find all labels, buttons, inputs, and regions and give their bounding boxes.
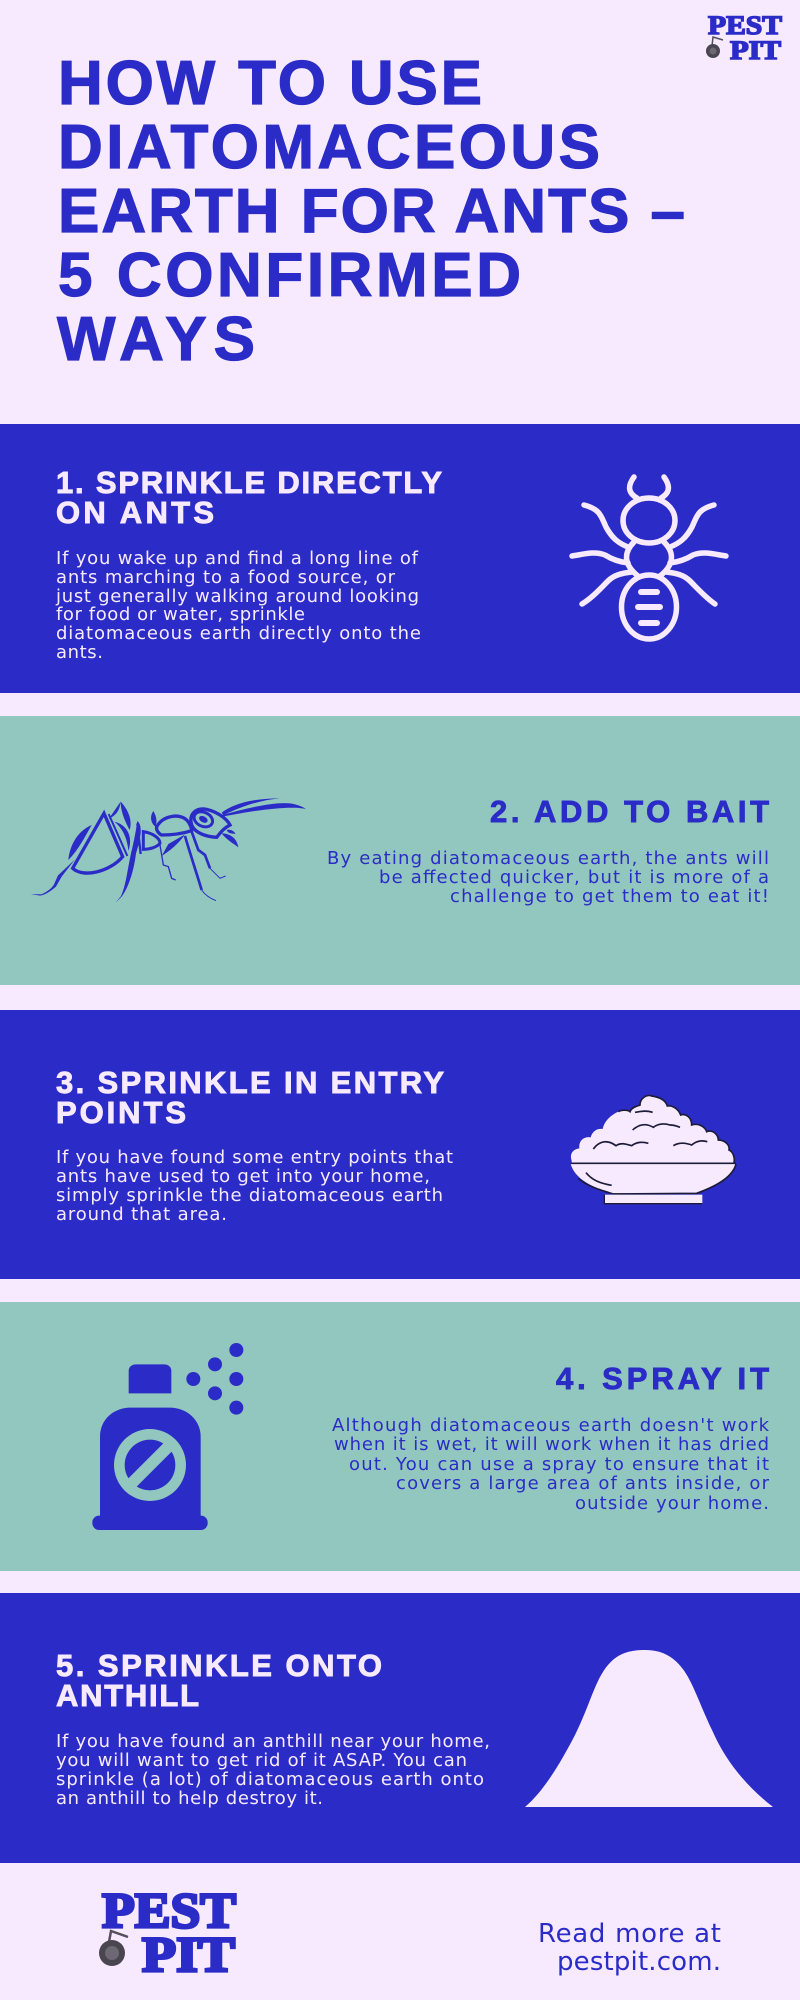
text: step 3 description: simply sprinkle the diatomaceous earth bbox=[56, 1185, 443, 1206]
text: step 1 description: for food or water, sprinkle bbox=[56, 604, 305, 625]
title: WAYS bbox=[57, 305, 255, 374]
text: step 1 description: ants marching to a food source, or bbox=[56, 567, 396, 588]
heading: step 3 bbox=[56, 1065, 444, 1130]
text: step 4 description bbox=[332, 1415, 770, 1514]
panel: 2 add to bait bbox=[0, 716, 800, 985]
text: step 3 description: around that area. bbox=[56, 1204, 227, 1225]
icon: ant outline bbox=[572, 477, 726, 639]
text: step 2 description: challenge to get them to eat it! bbox=[450, 886, 769, 907]
text: step 4 description: outside your home. bbox=[575, 1493, 769, 1514]
text: step 1 description: ants. bbox=[56, 642, 103, 663]
panel: 5 sprinkle onto anthill bbox=[0, 1593, 800, 1863]
heading: step 5: ANTHILL bbox=[56, 1678, 199, 1713]
heading: step 3: 3. SPRINKLE IN ENTRY bbox=[56, 1065, 444, 1100]
logo: top right: PEST bbox=[708, 11, 782, 40]
text: step 3 description: If you have found some entry points that bbox=[56, 1147, 453, 1168]
heading: step 5 bbox=[56, 1648, 382, 1713]
heading: step 3: POINTS bbox=[56, 1095, 186, 1130]
heading: step 2: 2. ADD TO BAIT bbox=[490, 794, 769, 829]
title: 5 CONFIRMED bbox=[58, 241, 521, 310]
logo: top right: PIT bbox=[730, 36, 781, 65]
panel: 1 sprinkle directly on ants bbox=[0, 424, 800, 693]
title: EARTH FOR ANTS – bbox=[58, 177, 685, 246]
text: read more: Read more at bbox=[538, 1919, 721, 1949]
heading: step 1 bbox=[56, 465, 442, 530]
text: step 2 description: be affected quicker, but it is more of a bbox=[379, 867, 769, 888]
text: step 2 description bbox=[327, 848, 769, 907]
heading: step 1: ON ANTS bbox=[56, 495, 214, 530]
title: DIATOMACEOUS bbox=[58, 113, 600, 182]
text: step 5 description: If you have found an anthill near your home, bbox=[56, 1731, 490, 1752]
text: step 4 description: when it is wet, it will work when it has dried bbox=[334, 1434, 769, 1455]
logo: footer: PIT bbox=[142, 1926, 235, 1982]
logo: top right bbox=[706, 11, 782, 65]
text: step 3 description: ants have used to get into your home, bbox=[56, 1166, 430, 1187]
text: read more: pestpit.com. bbox=[557, 1947, 721, 1977]
text: read more bbox=[538, 1919, 721, 1977]
heading: step 5: 5. SPRINKLE ONTO bbox=[56, 1648, 382, 1683]
logo: footer: PEST bbox=[102, 1882, 236, 1938]
title bbox=[57, 49, 685, 374]
text: step 5 description: you will want to get rid of it ASAP. You can bbox=[56, 1750, 467, 1771]
panel: 3 sprinkle in entry points bbox=[0, 1010, 800, 1279]
text: step 5 description bbox=[56, 1731, 490, 1809]
text: step 4 description: Although diatomaceous earth doesn't work bbox=[332, 1415, 770, 1436]
heading: step 4: 4. SPRAY IT bbox=[556, 1361, 769, 1396]
text: step 5 description: sprinkle (a lot) of diatomaceous earth onto bbox=[56, 1769, 484, 1790]
text: step 1 description: If you wake up and find a long line of bbox=[56, 548, 419, 569]
text: step 1 description bbox=[55, 548, 421, 663]
text: step 4 description: out. You can use a spray to ensure that it bbox=[349, 1454, 769, 1475]
heading: step 1: 1. SPRINKLE DIRECTLY bbox=[56, 465, 442, 500]
text: step 3 description bbox=[56, 1147, 453, 1225]
text: step 1 description: diatomaceous earth directly onto the bbox=[56, 623, 421, 644]
logo: footer bbox=[99, 1882, 236, 1982]
panel: 4 spray it bbox=[0, 1302, 800, 1571]
title: HOW TO USE bbox=[58, 49, 482, 118]
icon: spray bottle bbox=[92, 1343, 243, 1530]
icon: anthill mound bbox=[525, 1650, 773, 1807]
text: step 2 description: By eating diatomaceous earth, the ants will bbox=[327, 848, 769, 869]
text: step 4 description: covers a large area of ants inside, or bbox=[396, 1473, 770, 1494]
text: step 1 description: just generally walking around looking bbox=[55, 586, 419, 607]
icon: bowl of powder bbox=[571, 1096, 736, 1204]
text: step 5 description: an anthill to help destroy it. bbox=[56, 1788, 323, 1809]
icon: ant side view bbox=[31, 798, 306, 903]
